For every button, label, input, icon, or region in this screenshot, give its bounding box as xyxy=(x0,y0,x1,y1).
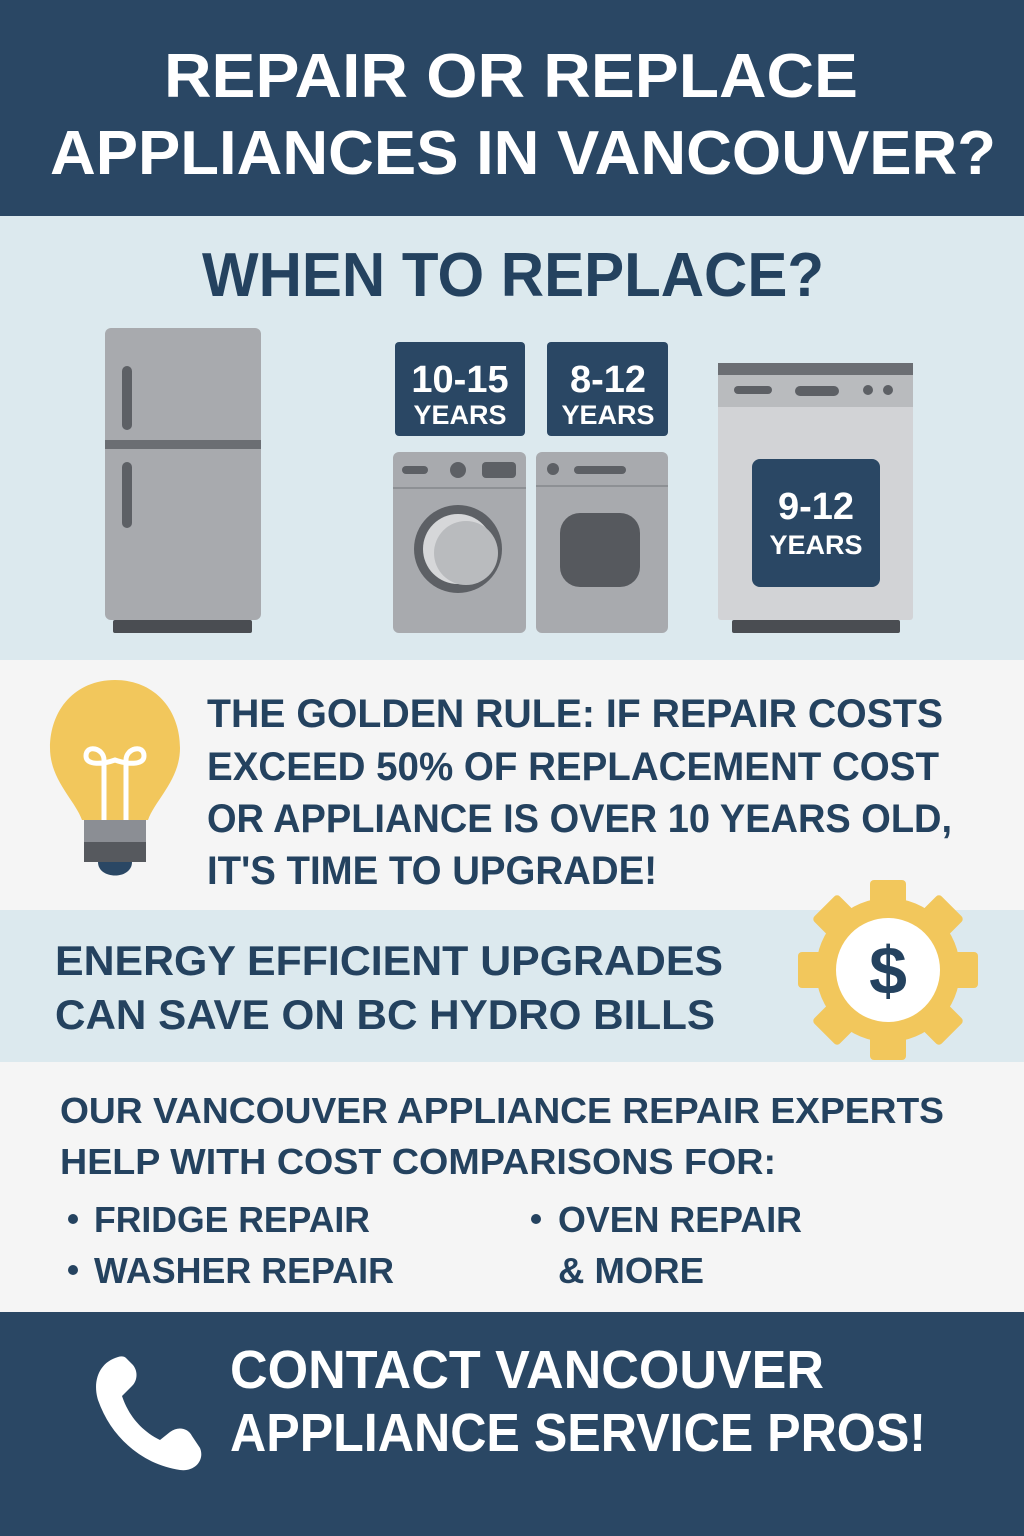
badge: dishwasher 9-12 years: 9-12 xyxy=(778,486,854,528)
text: experts intro: OUR VANCOUVER APPLIANCE REPAIR EXPERTS xyxy=(60,1090,944,1131)
footer banner xyxy=(0,1312,1024,1536)
panel: golden rule xyxy=(0,660,1024,910)
icon: phone xyxy=(96,1356,201,1470)
icon: fridge xyxy=(105,328,261,633)
text: golden rule: THE GOLDEN RULE: IF REPAIR COSTS xyxy=(207,692,943,736)
text: call to action: APPLIANCE SERVICE PROS! xyxy=(230,1403,926,1463)
badge: dryer 8-12 years: YEARS xyxy=(561,400,655,430)
title: APPLIANCES IN VANCOUVER? xyxy=(50,119,996,188)
badge: dryer 8-12 years xyxy=(547,342,668,436)
icon: dishwasher xyxy=(718,363,913,633)
panel: when to replace xyxy=(0,216,1024,660)
panel: energy efficiency xyxy=(0,880,1024,1062)
text: experts intro: HELP WITH COST COMPARISONS FOR: xyxy=(60,1141,776,1182)
text: golden rule: IT'S TIME TO UPGRADE! xyxy=(207,849,657,893)
header banner xyxy=(0,0,1024,216)
text: energy upgrades: CAN SAVE ON BC HYDRO BILLS xyxy=(55,991,715,1038)
list: services: FRIDGE REPAIR xyxy=(94,1199,370,1240)
text: call to action: CONTACT VANCOUVER xyxy=(230,1340,824,1400)
icon: gear with dollar xyxy=(798,880,978,1060)
list: services: OVEN REPAIR xyxy=(558,1199,802,1240)
badge: washer 10-15 years xyxy=(395,342,525,436)
icon: light bulb xyxy=(50,680,180,876)
text: golden rule xyxy=(207,692,952,893)
text: call to action xyxy=(230,1340,926,1463)
badge: washer 10-15 years: 10-15 xyxy=(411,359,509,401)
badge: dishwasher 9-12 years xyxy=(752,459,880,587)
panel: experts xyxy=(0,1062,1024,1312)
icon: washer xyxy=(393,452,526,633)
text: golden rule: OR APPLIANCE IS OVER 10 YEARS OLD, xyxy=(207,797,952,841)
icon: dryer xyxy=(536,452,668,633)
badge: dishwasher 9-12 years: YEARS xyxy=(769,530,863,560)
list: services: & MORE xyxy=(558,1250,704,1291)
text: experts intro xyxy=(60,1090,944,1182)
icon: gear with dollar: $ xyxy=(869,933,907,1009)
title xyxy=(50,42,996,188)
heading: when to replace: WHEN TO REPLACE? xyxy=(202,241,824,310)
list: services: WASHER REPAIR xyxy=(94,1250,394,1291)
badge: dryer 8-12 years: 8-12 xyxy=(570,359,646,401)
badge: washer 10-15 years: YEARS xyxy=(413,400,507,430)
title: REPAIR OR REPLACE xyxy=(164,42,858,111)
list: services xyxy=(68,1199,802,1291)
text: golden rule: EXCEED 50% OF REPLACEMENT COST xyxy=(207,745,939,789)
text: energy upgrades xyxy=(55,937,723,1038)
text: energy upgrades: ENERGY EFFICIENT UPGRADES xyxy=(55,937,723,984)
